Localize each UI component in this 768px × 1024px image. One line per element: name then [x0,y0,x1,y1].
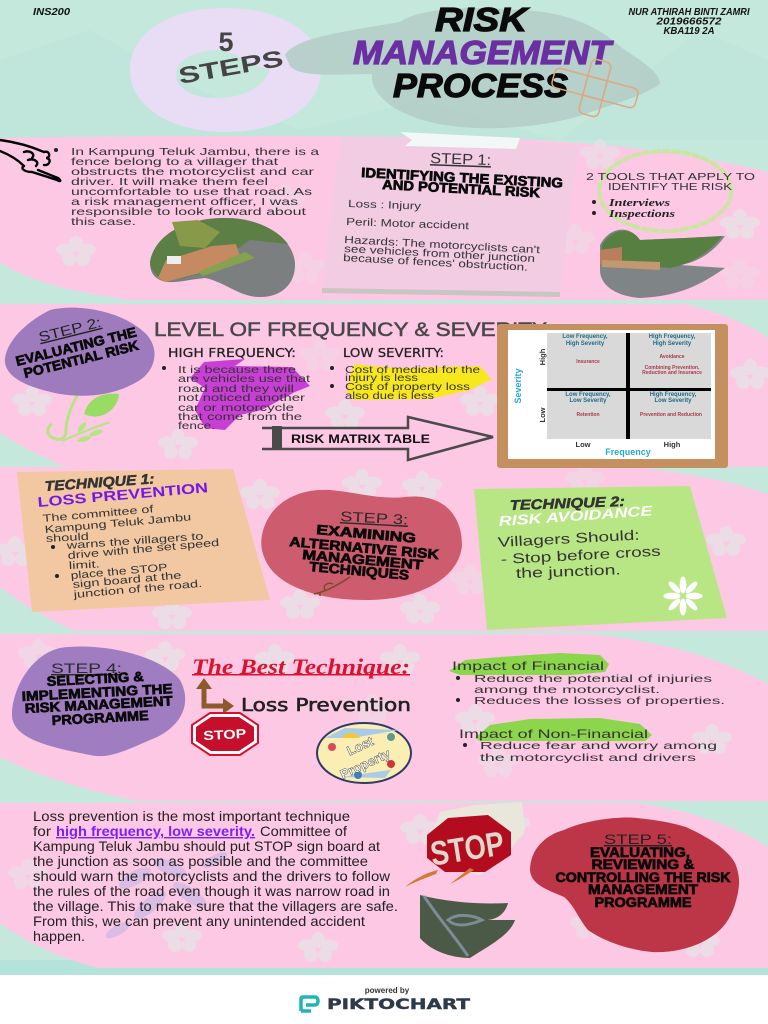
title: PROCESS [393,67,568,104]
step 1 details: Peril: Motor accident [346,216,469,232]
matrix cell labels: Low Severity [569,398,607,404]
icon: plant [48,392,119,443]
photo: stop sign [405,802,525,887]
pink band 1 [0,136,768,300]
step 1 label: STEP 1: [430,150,491,169]
title: RISK [435,1,530,38]
highlight: green brush 1 [449,653,609,675]
technique 1 body: warns the villagers to [65,530,204,552]
intro text: obstructs the motorcyclist and car [71,166,315,178]
technique 1 body: limit. [69,558,100,572]
student details: KBA119 2A [664,26,714,37]
step 1 note [322,132,578,297]
impact of financial: Reduces the losses of properties. [474,695,725,707]
icon: white flower [663,576,703,616]
technique 2 body [497,527,661,581]
impact of non-financial: the motorcyclist and drivers [480,752,696,764]
impact of non-financial: Reduce fear and worry among [480,740,717,752]
pink band 4 [0,634,768,801]
matrix cell labels: High Severity [566,341,605,347]
step 4 title: RISK MANAGEMENT [24,693,174,716]
step 4 title: IMPLEMENTING THE [21,681,173,704]
step 2 title [14,324,140,381]
high frequency column: not noticed another [178,392,306,404]
step 3 blob [261,490,462,600]
tools text [586,171,755,220]
technique 1 body: junction of the road. [72,578,203,601]
high frequency column: HIGH FREQUENCY: [168,346,296,360]
pink band 2 [0,304,768,467]
step 3 title: MANAGEMENT [302,547,425,573]
icon: lost property badge: Lost [344,733,376,759]
low severity column [330,346,480,402]
step 5 title: PROGRAMME [594,895,692,910]
technique 1 body [42,503,220,601]
step 1 title [361,165,563,200]
highlight: green brush 2 [475,718,652,741]
technique 1 body: sign board at the [72,570,182,591]
step 3 title: ALTERNATIVE RISK [289,534,440,562]
matrix cell labels: Combining Prevention, [645,365,700,371]
intro text: a risk management officer, I was [71,196,298,208]
technique 1 body: place the STOP [70,562,168,582]
matrix cell labels: Avoidance [659,354,685,360]
matrix cell labels: High Severity [653,341,692,347]
impact of non-financial: Impact of Non-Financial [459,727,648,741]
high frequency column: It is because there [178,364,296,376]
step 1 details: Loss : Injury [348,198,422,213]
5 steps heading: STEPS [176,45,285,89]
step 4 label: STEP 4: [51,660,122,676]
intro text: this case. [71,216,136,228]
technique 2 body: the junction. [516,561,621,581]
technique 1 body: Kampung Teluk Jambu [44,511,192,536]
technique 1 body: should [46,531,89,545]
tools text: Interviews [608,198,670,209]
step 5 title: CONTROLLING THE RISK [556,870,731,885]
step 3 title [289,522,440,583]
technique 1 body: The committee of [42,503,154,525]
low severity column: Cost of medical for the [345,364,480,376]
conclusion paragraph: Kampung Teluk Jambu should put STOP sign board at [33,838,380,854]
matrix cell labels: Low Frequency, [562,334,608,340]
icon: piktochart logo [301,997,318,1011]
impact of financial: Impact of Financial [452,659,604,673]
step 5 title [556,845,731,910]
tape [400,132,520,149]
icon: lost property badge: Property [338,746,393,782]
matrix axes [513,348,681,457]
intro text: responsible to look forward about [71,206,306,218]
high frequency column: road and they will [178,383,294,395]
matrix axes: Severity [513,368,523,404]
matrix cell labels: Reduction and Insurance [642,370,702,376]
step 1 title: IDENTIFYING THE EXISTING [361,165,563,191]
step 4 blob [12,647,185,756]
technique 1 heading: TECHNIQUE 1: [44,470,155,494]
conclusion paragraph: the village. This to make sure that the villagers are safe. [33,898,398,914]
conclusion paragraph: the rules of the road even though it was narrow road in [33,883,390,899]
intro text: uncomfortable to use that road. As [71,186,312,198]
technique 2 name: RISK AVOIDANCE [498,502,654,529]
5 steps heading [176,27,285,89]
arrow: risk matrix table: RISK MATRIX TABLE [291,432,430,446]
low severity column: LOW SEVERITY: [343,346,444,360]
low severity column: injury is less [345,372,418,384]
photo: fence and road [150,218,295,297]
photo: stop sign: STOP [428,825,507,874]
step 1 details: Hazards: The motorcyclists can't [344,234,540,256]
intro text: driver. It will make them feel [71,176,268,188]
step 4 title: SELECTING & [46,669,144,689]
step 4 title [21,669,174,728]
pink band 3 [0,467,768,631]
high frequency column: are vehicles use that [178,373,310,385]
heading: level of frequency and severity: LEVEL OF FREQUENCY & SEVERITY [154,320,547,341]
step 2 title: POTENTIAL RISK [22,338,140,381]
matrix cell labels: Retention [576,412,600,418]
5 steps heading: 5 [218,27,234,57]
step 1 details: see vehicles from other junction [344,243,535,265]
highlight: magenta brush [190,359,310,430]
tools text: 2 TOOLS THAT APPLY TO [586,171,755,183]
matrix axes: Frequency [605,447,651,457]
matrix cell labels [562,334,702,418]
icon: bandage [546,50,644,126]
matrix axes: High [538,348,547,365]
impact of financial: among the motorcyclist. [474,684,660,696]
conclusion paragraph [33,808,398,944]
arrow: risk matrix table [262,417,493,460]
step 2 title: EVALUATING THE [14,324,138,369]
step 5 title: REVIEWING & [592,857,695,872]
technique 2 heading: TECHNIQUE 2: [510,493,625,513]
step 5 title: EVALUATING, [590,845,690,860]
matrix cell labels: Prevention and Reduction [640,412,702,418]
step 5 blob [530,818,739,952]
conclusion paragraph: happen. [33,928,85,944]
conclusion paragraph: high frequency, low severity. [56,823,255,839]
photo: aerial road [420,895,515,958]
technique 2 body: - Stop before cross [500,543,661,567]
student details: 2019666572 [655,16,722,28]
impact of financial: Reduce the potential of injuries [474,673,712,685]
conclusion paragraph: for [33,823,51,839]
pink band 5 [0,803,768,968]
lavender brush circle [130,8,321,132]
icon: stop sign: STOP [203,726,247,743]
low severity column: also due is less [345,390,434,402]
icon: twig [314,577,350,596]
text: loss prevention: Loss Prevention [241,695,411,716]
conclusion paragraph: should warn the motorcyclists and the drivers to follow [33,868,391,884]
student details: NUR ATHIRAH BINTI ZAMRI [628,7,750,18]
tools text: Inspections [608,209,675,220]
arrow: bent arrow [196,678,234,714]
matrix axes: Low [538,407,547,422]
step 2 label: STEP 2: [37,314,103,345]
step 3 title: EXAMINING [316,522,417,546]
high frequency column: car or motorcycle [178,402,294,414]
green pixel ring [599,151,731,231]
step 4 title: PROGRAMME [51,708,149,728]
matrix cell labels: High Frequency, [649,334,696,340]
icon: pointing hand [0,140,60,181]
step 3 label: STEP 3: [340,508,409,528]
icon: stop sign [192,713,258,755]
step 1 details [343,198,540,274]
matrix cell labels: High Frequency, [650,392,697,398]
step 2 blob [5,308,154,396]
high frequency column [162,346,310,432]
matrix cell labels: Insurance [576,359,600,365]
matrix cell labels: Low Frequency, [565,392,611,398]
step 1 title: AND POTENTIAL RISK [382,177,541,200]
wordmark: PIKTOCHART [327,997,471,1013]
technique 1 note [17,469,270,612]
step 5 title: MANAGEMENT [588,882,699,897]
grey brush blob behind title [285,8,660,128]
footer: powered by piktochart: powered by [365,986,410,995]
risk matrix [497,324,728,468]
high frequency column: fence. [178,420,215,432]
matrix cell labels: Low Severity [654,398,692,404]
step 3 title: TECHNIQUES [309,559,410,583]
photo: village road [600,230,725,298]
intro text: In Kampung Teluk Jambu, there is a [71,146,319,158]
technique 1 body: drive with the set speed [67,537,220,562]
step 1 details: because of fences' obstruction. [343,252,528,274]
decorative lavender foliage [103,849,230,941]
intro text: fence belong to a villager that [71,156,278,168]
impact of financial [452,659,725,707]
heading: the best technique: The Best Technique: [192,654,410,679]
icon: lost property badge [317,723,411,783]
conclusion paragraph: the junction as soon as possible and the committee [33,853,368,869]
student details [628,7,750,37]
highlight: yellow brush [347,364,492,400]
footer: powered by piktochart [301,986,471,1013]
matrix axes: Low [576,440,591,449]
tools text: IDENTIFY THE RISK [608,181,732,193]
matrix axes: High [664,440,681,449]
low severity column: Cost of property loss [345,381,470,393]
conclusion paragraph: Committee of [260,823,347,839]
conclusion paragraph: From this, we can prevent any unintended accident [33,913,365,929]
title [353,1,614,104]
course code: INS200 [33,7,70,18]
technique 2 body: Villagers Should: [497,527,640,550]
high frequency column: that come from the [178,411,302,423]
step 5 label: STEP 5: [604,831,672,847]
title: MANAGEMENT [353,34,614,71]
conclusion paragraph: Loss prevention is the most important technique [33,808,350,824]
technique 1 name: LOSS PREVENTION [37,479,209,510]
technique 2 note [474,486,727,630]
impact of non-financial [459,727,717,764]
intro text [54,146,319,228]
